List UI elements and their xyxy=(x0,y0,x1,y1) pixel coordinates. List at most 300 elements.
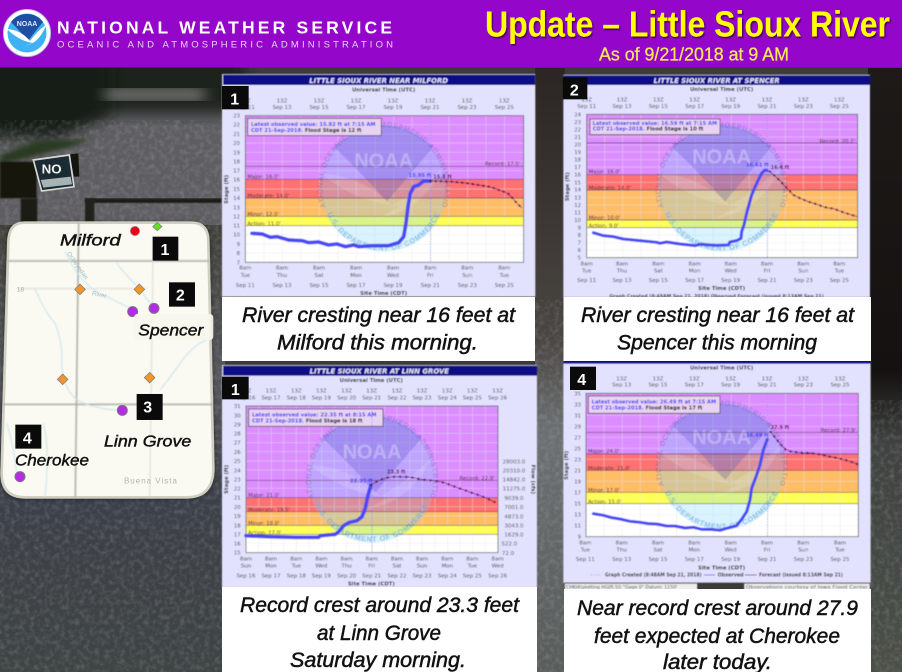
panel: Linn Grove hydrograph: Tue xyxy=(467,564,478,570)
panel: Cherokee hydrograph: 8am xyxy=(688,540,700,546)
panel: Spencer hydrograph: LITTLE SIOUX RIVER AT SPENCER xyxy=(654,77,780,85)
panel: Linn Grove hydrograph: Sep 20 xyxy=(337,573,357,579)
panel: Spencer hydrograph: 11 xyxy=(574,210,581,216)
panel: Milford hydrograph: Sep 15 xyxy=(309,283,329,289)
panel: Milford hydrograph: 13Z xyxy=(462,98,473,104)
panel: Spencer hydrograph: 8am xyxy=(725,261,737,267)
panel: Milford hydrograph: Sep 21 xyxy=(420,105,440,111)
panel: Linn Grove hydrograph: Sep 25 xyxy=(463,573,482,579)
panel: Linn Grove hydrograph: Sep 26 xyxy=(488,396,508,402)
panel: Spencer hydrograph: 8am xyxy=(689,261,701,267)
panel: Cherokee hydrograph: Fri xyxy=(764,548,771,554)
panel: Spencer hydrograph: Latest observed value: 16.59 ft at 7:15 AM xyxy=(593,121,717,127)
panel: Cherokee hydrograph: 8am xyxy=(579,540,591,546)
panel: Milford hydrograph: Sat xyxy=(314,273,324,279)
panel: Linn Grove hydrograph: 21 xyxy=(234,496,241,502)
panel: Spencer hydrograph: Moderate: 14.0' xyxy=(589,186,631,192)
panel: Milford hydrograph: Universal Time (UTC) xyxy=(352,88,415,94)
panel: Milford hydrograph xyxy=(221,73,536,298)
panel: Linn Grove hydrograph: 8am xyxy=(315,556,327,562)
panel: Linn Grove hydrograph: Minor: 18.0' xyxy=(248,521,280,527)
panel: Milford hydrograph: Site Time (CDT) xyxy=(360,291,407,297)
panel: Linn Grove hydrograph: Sep 16 xyxy=(236,396,256,402)
panel: Cherokee hydrograph: 35 xyxy=(574,391,581,397)
panel: Milford hydrograph: Sep 17 xyxy=(346,105,366,111)
panel: Spencer hydrograph: 21 xyxy=(574,135,581,141)
panel: Milford hydrograph: 8am xyxy=(461,266,473,272)
header: National Weather Service: NATIONAL WEATHER SERVICE xyxy=(57,18,392,38)
panel: Milford hydrograph: 13Z xyxy=(240,98,251,104)
panel: Cherokee hydrograph: Sep 23 xyxy=(794,557,813,563)
panel: Milford hydrograph: 8am xyxy=(276,266,288,272)
panel: Milford hydrograph: 15.8 ft xyxy=(433,174,453,180)
panel: Linn Grove hydrograph: 28003.0 xyxy=(503,459,526,465)
panel: Cherokee hydrograph: 26.49 ft xyxy=(746,433,769,439)
panel: Linn Grove hydrograph: Fri xyxy=(368,564,375,570)
panel: Spencer hydrograph: 9 xyxy=(578,225,582,231)
panel: Spencer hydrograph: 22 xyxy=(574,127,581,133)
panel: Milford hydrograph: Major: 16.0' xyxy=(247,174,279,180)
panel: Cherokee hydrograph: Moderate: 21.0' xyxy=(588,466,630,472)
map badge 1: 1 xyxy=(161,242,170,259)
panel: Spencer hydrograph: Action: 9.0' xyxy=(589,223,619,229)
panel: Linn Grove hydrograph: Thu xyxy=(340,564,352,570)
panel: locator map: 18 xyxy=(17,286,24,293)
panel: Spencer hydrograph: 16 xyxy=(574,173,582,179)
panel: Spencer hydrograph: 8am xyxy=(652,261,664,267)
panel: Milford hydrograph: Fri xyxy=(427,273,434,279)
panel: Milford hydrograph: Minor: 12.0' xyxy=(247,212,279,218)
panel: Spencer hydrograph: Universal Time (UTC) xyxy=(690,87,753,93)
panel: Cherokee hydrograph: 9 xyxy=(578,535,582,541)
panel: Spencer hydrograph: 8am xyxy=(581,261,593,267)
panel: Linn Grove hydrograph: 16 xyxy=(234,542,241,548)
panel: Milford hydrograph: Sep 13 xyxy=(272,105,292,111)
panel: Spencer hydrograph: Sep 23 xyxy=(794,104,813,110)
panel: Spencer hydrograph: 7 xyxy=(578,241,581,247)
panel: Linn Grove hydrograph: 13Z xyxy=(291,389,302,395)
panel: Cherokee hydrograph: 33 xyxy=(574,402,581,408)
panel: Cherokee hydrograph: Major: 24.0' xyxy=(588,449,620,455)
panel: Cherokee hydrograph: Sep 17 xyxy=(685,557,704,563)
panel: Cherokee hydrograph: Observed xyxy=(718,573,744,579)
panel: Spencer hydrograph: Site Time (CDT) xyxy=(698,286,745,292)
panel: Milford hydrograph: 7 xyxy=(237,260,240,266)
panel: Linn Grove hydrograph: 24 xyxy=(234,468,241,474)
panel: Spencer hydrograph: Minor: 10.0' xyxy=(589,216,620,222)
panel: Spencer hydrograph: 14 xyxy=(574,188,582,194)
panel: Linn Grove hydrograph: Sep 17 xyxy=(261,573,281,579)
panel: Linn Grove hydrograph: 13Z xyxy=(341,389,352,395)
panel: Spencer hydrograph: Stage (ft) xyxy=(565,172,571,201)
panel: Cherokee hydrograph: Sep 17 xyxy=(685,383,704,389)
panel: Cherokee hydrograph: Action: 15.0' xyxy=(588,499,622,505)
panel: Linn Grove hydrograph: Sep 17 xyxy=(261,396,281,402)
panel: Linn Grove hydrograph xyxy=(221,364,538,588)
panel: Milford hydrograph: 15 xyxy=(233,187,240,193)
panel: Linn Grove hydrograph: 13Z xyxy=(316,389,327,395)
panel: Linn Grove hydrograph: Sep 18 xyxy=(287,396,306,402)
panel: Linn Grove hydrograph: Sat xyxy=(392,564,402,570)
panel: Cherokee hydrograph: Site Time (CDT) xyxy=(698,565,745,571)
panel: Milford hydrograph: 13Z xyxy=(314,98,325,104)
caption: Linn Grove xyxy=(222,587,537,672)
panel: Cherokee hydrograph: Tue xyxy=(834,548,845,554)
panel: Linn Grove hydrograph: 8am xyxy=(265,556,277,562)
panel: Cherokee hydrograph: 23 xyxy=(574,457,581,463)
panel: Linn Grove hydrograph: 22.35 ft xyxy=(350,478,373,484)
panel: Milford hydrograph: Thu xyxy=(276,273,287,279)
panel: Spencer hydrograph: 6 xyxy=(578,248,582,254)
panel: Milford hydrograph: Latest observed value: 15.82 ft at 7:15 AM xyxy=(251,122,375,128)
panel: Linn Grove hydrograph: LITTLE SIOUX RIVER AT LINN GROVE xyxy=(310,368,449,376)
panel: Spencer hydrograph: 5 xyxy=(578,256,581,262)
photo detail: no trespassing sign and fence xyxy=(0,140,222,223)
icon: NOAA logo: NOAA xyxy=(17,21,37,28)
panel: Linn Grove hydrograph: 23.3 ft xyxy=(387,470,406,476)
panel: locator map: Ocheyedan xyxy=(65,250,90,281)
panel: Linn Grove hydrograph: Sep 23 xyxy=(412,396,432,402)
panel: Cherokee hydrograph: 21 xyxy=(574,468,581,474)
panel: Milford hydrograph: Sep 11 xyxy=(236,283,255,289)
panel: Linn Grove hydrograph: Flow (cfs) xyxy=(529,465,535,494)
panel: Spencer hydrograph: Sep 21 xyxy=(757,278,777,284)
panel: Spencer hydrograph: 13Z xyxy=(798,98,809,104)
panel: Milford hydrograph: NATIONAL OCEANIC AND ATMOSPHERIC ADMINISTRATION xyxy=(317,122,450,208)
panel: Milford hydrograph: 13 xyxy=(233,205,240,211)
panel: locator map: River xyxy=(91,290,107,300)
panel: Linn Grove hydrograph: 28 xyxy=(234,432,241,438)
subtitle: date: As of 9/21/2018 at 9 AM xyxy=(599,44,789,64)
panel: Spencer hydrograph: 13Z xyxy=(689,98,700,104)
panel: Cherokee hydrograph: Sep 11 xyxy=(576,557,595,563)
panel: Spencer hydrograph: Sat xyxy=(654,269,664,275)
panel: Cherokee hydrograph: 15 xyxy=(574,502,581,508)
panel: Cherokee hydrograph: Sep 21 xyxy=(757,557,777,563)
panel: Cherokee hydrograph: 13 xyxy=(574,513,581,519)
panel: Cherokee hydrograph: Sep 15 xyxy=(648,383,668,389)
panel: Linn Grove hydrograph: 20310.0 xyxy=(503,468,526,474)
panel: Cherokee hydrograph: CHKI4(plotting HG[R.5]) "Gage 0" Datum: 1150' xyxy=(566,585,677,591)
panel: Spencer hydrograph: Sep 17 xyxy=(685,278,705,284)
caption: Milford: River cresting near 16 feet at xyxy=(242,304,516,327)
panel: Cherokee hydrograph: Sep 19 xyxy=(721,383,741,389)
panel: Cherokee hydrograph: 8am xyxy=(761,540,773,546)
panel: Spencer hydrograph: 8am xyxy=(797,261,809,267)
panel: Linn Grove hydrograph: Sep 16 xyxy=(236,573,256,579)
panel: Linn Grove hydrograph: Sep 24 xyxy=(438,396,457,402)
panel: Milford hydrograph: Sep 23 xyxy=(458,283,477,289)
panel: Linn Grove hydrograph: 13Z xyxy=(392,389,403,395)
panel: Cherokee hydrograph: 13Z xyxy=(653,376,664,382)
panel: Milford hydrograph: LITTLE SIOUX RIVER NEAR MILFORD xyxy=(309,77,448,85)
panel: Linn Grove hydrograph: 4873.0 xyxy=(504,514,524,520)
panel: Milford hydrograph: 14 xyxy=(233,196,241,202)
panel: Linn Grove hydrograph: 25 xyxy=(234,459,241,465)
panel: Spencer hydrograph: 2 xyxy=(570,83,579,100)
panel: Milford hydrograph: Sep 19 xyxy=(383,105,403,111)
panel: Linn Grove hydrograph: Mon xyxy=(442,564,454,570)
panel: Linn Grove hydrograph: Tue xyxy=(291,564,302,570)
panel: Linn Grove hydrograph: 17 xyxy=(234,532,241,538)
panel: Milford hydrograph: 1 xyxy=(230,92,239,109)
panel: Linn Grove hydrograph: 30 xyxy=(234,413,241,419)
panel: Milford hydrograph: 21 xyxy=(233,132,240,138)
panel: Linn Grove hydrograph: 19 xyxy=(234,514,241,520)
panel: Linn Grove hydrograph: 3043.0 xyxy=(504,523,524,529)
panel: Milford hydrograph: 9 xyxy=(237,242,241,248)
panel: Linn Grove hydrograph: Sun xyxy=(241,564,252,570)
panel: Linn Grove hydrograph: Latest observed value: 22.35 ft at 8:15 AM xyxy=(252,413,376,419)
panel: Cherokee hydrograph: Graph Created (8:48AM Sep 21, 2018) xyxy=(605,573,702,579)
panel: Cherokee hydrograph: Sep 25 xyxy=(830,557,850,563)
panel: Spencer hydrograph: Sep 19 xyxy=(721,278,741,284)
panel: Spencer hydrograph: Sun xyxy=(798,269,809,275)
panel: Milford hydrograph: 10 xyxy=(233,233,241,239)
panel: Linn Grove hydrograph: 7001.0 xyxy=(504,505,524,511)
panel: Linn Grove hydrograph: 13Z xyxy=(442,389,453,395)
panel: Linn Grove hydrograph: 13Z xyxy=(417,389,428,395)
panel: Spencer hydrograph: Sep 13 xyxy=(612,278,632,284)
panel: Linn Grove hydrograph: Sep 22 xyxy=(387,396,407,402)
map label: Milford: Milford xyxy=(60,232,122,249)
panel: Cherokee hydrograph: 13Z xyxy=(725,376,736,382)
panel: Spencer hydrograph: 13Z xyxy=(834,98,845,104)
panel: Cherokee hydrograph: NATIONAL OCEANIC AND ATMOSPHERIC ADMINISTRATION xyxy=(655,400,788,486)
panel: Spencer hydrograph: 23 xyxy=(574,120,581,126)
map marker: Milford red gauge xyxy=(130,226,140,236)
panel: Linn Grove hydrograph: 9039.0 xyxy=(504,496,524,502)
panel: Milford hydrograph: CDT 21-Sep-2018. Flood Stage is 12 ft xyxy=(251,128,362,134)
panel: Cherokee hydrograph: 8am xyxy=(725,540,737,546)
panel: Spencer hydrograph: Major: 16.0' xyxy=(589,170,620,176)
panel: Linn Grove hydrograph: 13Z xyxy=(492,389,503,395)
map label: Linn Grove: Linn Grove xyxy=(104,434,192,451)
panel: Cherokee hydrograph: Mon xyxy=(689,548,701,554)
panel: Cherokee hydrograph: Wed xyxy=(725,548,737,554)
panel: Cherokee hydrograph: 8am xyxy=(797,540,809,546)
panel: Cherokee hydrograph: 31 xyxy=(574,413,581,419)
panel: Linn Grove hydrograph: Site Time (CDT) xyxy=(348,582,395,588)
panel: Spencer hydrograph: NOAA xyxy=(692,146,751,168)
map label: Cherokee: Cherokee xyxy=(15,453,89,470)
panel: Linn Grove hydrograph: 8am xyxy=(341,556,353,562)
panel: Milford hydrograph: Sep 17 xyxy=(346,283,366,289)
panel: Milford hydrograph: 8am xyxy=(387,266,399,272)
panel: Cherokee hydrograph: Sep 21 xyxy=(757,383,777,389)
panel: Spencer hydrograph xyxy=(562,74,871,299)
panel: Milford hydrograph: Moderate: 14.0' xyxy=(247,194,290,200)
panel: Cherokee hydrograph: 27.9 ft xyxy=(771,425,790,431)
panel: Milford hydrograph: 15.95 ft xyxy=(409,173,432,179)
caption: Milford: Milford this morning. xyxy=(277,332,478,354)
panel: Milford hydrograph: Sep 25 xyxy=(495,105,514,111)
panel: Linn Grove hydrograph: Sep 20 xyxy=(337,396,357,402)
panel: Spencer hydrograph: Sep 25 xyxy=(830,278,849,284)
panel: Spencer hydrograph: 17 xyxy=(574,165,581,171)
caption: Cherokee: Near record crest around 27.9 xyxy=(577,597,858,620)
map badge 1 xyxy=(153,237,178,261)
panel: Spencer hydrograph: 20 xyxy=(574,143,582,149)
panel: Linn Grove hydrograph: 11275.0 xyxy=(503,487,526,493)
panel: Cherokee hydrograph: 25 xyxy=(574,446,581,452)
panel: Spencer hydrograph: Thu xyxy=(616,269,627,275)
panel: Milford hydrograph: Record: 17.5' xyxy=(485,162,520,168)
panel: Spencer hydrograph: 8 xyxy=(578,233,582,239)
panel: Linn Grove hydrograph: 22 xyxy=(234,487,241,493)
panel: Milford hydrograph: Action: 11.0' xyxy=(247,221,281,227)
panel: Milford hydrograph: Sep 11 xyxy=(236,105,255,111)
panel: Cherokee hydrograph: 11 xyxy=(574,524,581,530)
panel: Cherokee hydrograph: Universal Time (UTC) xyxy=(690,366,753,372)
panel: Milford hydrograph: 13Z xyxy=(499,98,510,104)
panel: locator map: Buena Vista xyxy=(124,477,178,486)
panel: Cherokee hydrograph: 13Z xyxy=(689,376,700,382)
map badge 2 xyxy=(169,282,195,307)
panel: Cherokee hydrograph: 29 xyxy=(574,424,582,430)
panel: Linn Grove hydrograph: Sun xyxy=(417,564,428,570)
panel: Spencer hydrograph: 19 xyxy=(574,150,582,156)
panel: Milford hydrograph: 12 xyxy=(233,214,240,220)
map badge 3 xyxy=(137,394,163,420)
panel: Linn Grove hydrograph: 31 xyxy=(234,404,241,410)
panel: Spencer hydrograph: U.S. DEPARTMENT OF COMMERCE xyxy=(666,212,778,251)
panel: Linn Grove hydrograph: Wed xyxy=(492,564,504,570)
caption: Cherokee xyxy=(564,589,871,672)
map markers: orange gauges xyxy=(57,284,155,385)
panel: Linn Grove hydrograph: Sep 23 xyxy=(412,573,432,579)
panel: Spencer hydrograph: Wed xyxy=(725,269,737,275)
panel: Linn Grove hydrograph: Sep 21 xyxy=(362,396,381,402)
panel: Milford hydrograph: 23 xyxy=(233,114,240,120)
panel: Milford hydrograph: Sep 21 xyxy=(421,283,440,289)
map badge 3: 3 xyxy=(143,400,152,417)
panel: Cherokee hydrograph: 13Z xyxy=(835,376,846,382)
caption: Spencer xyxy=(564,297,871,361)
panel: Linn Grove hydrograph: Sep 22 xyxy=(387,573,407,579)
panel: Spencer hydrograph: Sep 21 xyxy=(757,104,777,110)
panel: Milford hydrograph: Stage (ft) xyxy=(224,175,230,204)
panel: Spencer hydrograph: Sep 25 xyxy=(830,104,849,110)
panel: Linn Grove hydrograph: Sep 21 xyxy=(362,573,381,579)
panel: Linn Grove hydrograph: 8am xyxy=(466,556,478,562)
panel: Milford hydrograph: 20 xyxy=(233,141,241,147)
panel: Linn Grove hydrograph: 522.0 xyxy=(501,542,518,548)
panel: Milford hydrograph: 8am xyxy=(424,266,436,272)
panel: Milford hydrograph: 13Z xyxy=(277,98,288,104)
map marker: green gauge xyxy=(153,222,162,231)
panel: Spencer hydrograph: Sep 15 xyxy=(649,104,668,110)
caption: Spencer: River cresting near 16 feet at xyxy=(581,304,855,327)
panel: Milford hydrograph: 18 xyxy=(233,159,241,165)
panel: Milford hydrograph: NOAA xyxy=(354,151,413,173)
map badge 4 xyxy=(15,425,41,449)
panel: Milford hydrograph: Mon xyxy=(350,273,362,279)
panel: Linn Grove hydrograph: Action: 17.0' xyxy=(248,530,282,536)
caption: Linn Grove: Saturday morning. xyxy=(290,649,466,672)
panel: Spencer hydrograph: Sep 17 xyxy=(685,104,705,110)
panel: Milford hydrograph: 8am xyxy=(498,266,510,272)
panel: Spencer hydrograph: Sep 13 xyxy=(612,104,632,110)
panel: Linn Grove hydrograph: Sep 25 xyxy=(463,396,482,402)
panel: Linn Grove hydrograph: Universal Time (UTC) xyxy=(340,378,403,384)
panel: Linn Grove hydrograph: Sep 19 xyxy=(312,573,331,579)
panel: Milford hydrograph: 22 xyxy=(233,123,240,129)
panel: Linn Grove hydrograph: 8am xyxy=(366,556,378,562)
panel: Spencer hydrograph: 13Z xyxy=(725,98,736,104)
panel: Linn Grove hydrograph: 8am xyxy=(290,556,302,562)
panel: Milford hydrograph: Wed xyxy=(387,273,399,279)
caption: Cherokee: feet expected at Cherokee xyxy=(594,625,840,648)
panel: Linn Grove hydrograph: 13Z xyxy=(366,389,377,395)
panel: Spencer hydrograph: 16.61 ft xyxy=(746,163,769,169)
panel: Linn Grove hydrograph: Sep 24 xyxy=(438,573,457,579)
panel: Cherokee hydrograph: NOAA xyxy=(692,427,751,449)
panel: Milford hydrograph: 13Z xyxy=(388,98,399,104)
panel: Linn Grove hydrograph: 8am xyxy=(416,556,428,562)
panel: Linn Grove hydrograph: Sep 19 xyxy=(312,396,331,402)
panel: Spencer hydrograph: 13Z xyxy=(653,98,664,104)
panel: Cherokee hydrograph: Sep 25 xyxy=(830,383,850,389)
panel: Spencer hydrograph: Sep 19 xyxy=(721,104,741,110)
panel: Spencer hydrograph: Sep 23 xyxy=(794,278,813,284)
panel: Linn Grove hydrograph: 18 xyxy=(234,523,241,529)
panel: Linn Grove hydrograph: 13Z xyxy=(467,389,478,395)
panel: Cherokee hydrograph: 13Z xyxy=(762,376,773,382)
panel: Spencer hydrograph: 12 xyxy=(574,203,581,209)
panel: Spencer hydrograph: Graph Created (8:48AM Sep 21, 2018) Observed Forecast (issued 8:13AM Sep 21) xyxy=(609,293,824,299)
panel: Milford hydrograph: Sep 23 xyxy=(457,105,477,111)
panel: Linn Grove hydrograph: Major: 21.0' xyxy=(248,493,280,499)
panel: Milford hydrograph: 19 xyxy=(233,150,241,156)
panel: Spencer hydrograph: Fri xyxy=(764,269,771,275)
panel: Cherokee hydrograph: Forecast (issued 8:13AM Sep 21) xyxy=(759,573,843,579)
panel: Linn Grove hydrograph: Sep 18 xyxy=(287,573,306,579)
panel: Linn Grove hydrograph: 23 xyxy=(234,477,241,483)
caption: Linn Grove: at Linn Grove xyxy=(317,622,441,645)
caption: Linn Grove: Record crest around 23.3 feet xyxy=(240,594,520,617)
panel: Milford hydrograph: 16 xyxy=(233,178,241,184)
panel: Linn Grove hydrograph: CDT 21-Sep-2018. Flood Stage is 18 ft xyxy=(252,419,363,425)
panel: Cherokee hydrograph: Thu xyxy=(616,548,627,554)
panel: Spencer hydrograph: CDT 21-Sep-2018. Flood Stage is 10 ft xyxy=(593,127,704,133)
panel: Linn Grove hydrograph: Mon xyxy=(265,564,277,570)
panel: Cherokee hydrograph xyxy=(562,360,872,591)
panel: Cherokee hydrograph: Record: 27.9' xyxy=(821,428,856,434)
panel: Linn Grove hydrograph: U.S. DEPARTMENT OF COMMERCE xyxy=(316,502,428,542)
panel: Milford hydrograph: Sun xyxy=(462,273,473,279)
panel: Cherokee hydrograph: Sep 19 xyxy=(721,557,741,563)
panel: Milford hydrograph: 8am xyxy=(350,266,362,272)
panel: Cherokee hydrograph: Sep 13 xyxy=(612,557,632,563)
panel: Linn Grove hydrograph: 13Z xyxy=(266,389,277,395)
panel: Spencer hydrograph: Mon xyxy=(689,269,701,275)
panel: Milford hydrograph: Sep 25 xyxy=(495,283,514,289)
panel: Linn Grove hydrograph: 1629.0 xyxy=(504,533,524,539)
panel: Linn Grove hydrograph: 14842.0 xyxy=(503,478,526,484)
panel: Spencer hydrograph: Tue xyxy=(581,269,592,275)
panel: Milford hydrograph: U.S. DEPARTMENT OF COMMERCE xyxy=(328,212,440,251)
panel: Cherokee hydrograph: Sat xyxy=(653,548,663,554)
panel: Milford hydrograph: Sep 15 xyxy=(309,105,329,111)
panel: Spencer hydrograph: 16.4 ft xyxy=(771,165,790,171)
header bar xyxy=(0,0,902,68)
map markers: purple flood gauges xyxy=(15,303,159,482)
panel: Linn Grove hydrograph: Sep 26 xyxy=(488,573,508,579)
panel: Milford hydrograph: Tue xyxy=(240,273,251,279)
panel: Spencer hydrograph: 10 xyxy=(574,218,582,224)
panel: Cherokee hydrograph: Sep 13 xyxy=(612,383,632,389)
